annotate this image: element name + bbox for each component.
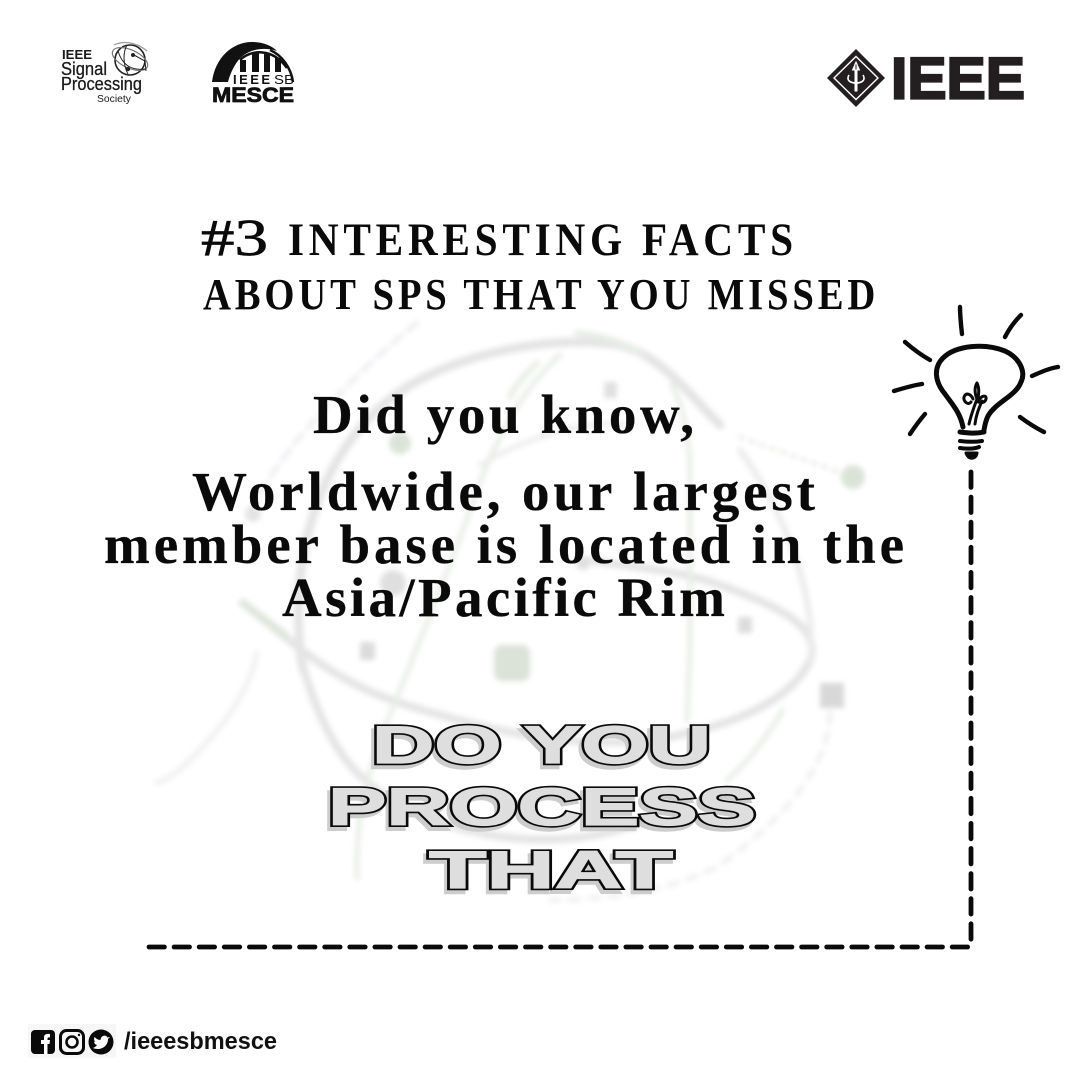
social footer xyxy=(28,1024,277,1058)
icon: instagram xyxy=(60,1030,84,1054)
logo: IEEE Signal Processing Society xyxy=(61,43,151,105)
logo: IEEE main xyxy=(827,46,1025,112)
body: fact statement: Worldwide, our largest xyxy=(192,461,816,522)
icon: signal processing globe xyxy=(109,43,151,75)
icon: twitter xyxy=(88,1030,114,1054)
heading: #3 interesting facts: INTERESTING FACTS xyxy=(288,214,793,266)
callout: do you process that: PROCESS xyxy=(328,778,756,837)
icon: facebook xyxy=(31,1030,55,1054)
subheading: about SPS: ABOUT SPS THAT YOU MISSED xyxy=(203,270,875,319)
body: fact statement xyxy=(104,461,904,628)
callout: do you process that: DO YOU xyxy=(369,720,708,779)
callout: do you process that: THAT xyxy=(429,841,673,900)
logo: IEEE SB MESCE xyxy=(212,42,294,107)
callout: do you process that: PROCESS xyxy=(328,778,756,837)
callout: do you process that: THAT xyxy=(429,841,673,900)
social handle: /ieeesbmesce xyxy=(124,1028,277,1055)
logo: IEEE SB MESCE: MESCE xyxy=(212,84,294,107)
logo: IEEE main: IEEE xyxy=(891,46,1025,112)
logo: IEEE Signal Processing Society: Signal xyxy=(61,58,107,79)
icon: light bulb xyxy=(894,307,1058,458)
body: did you know: Did you know, xyxy=(313,384,694,445)
logo: IEEE SB MESCE: SB xyxy=(274,72,294,87)
logo: IEEE Signal Processing Society: Society xyxy=(97,93,132,105)
callout: do you process that: THAT xyxy=(426,845,670,904)
callout: do you process that: DO YOU xyxy=(372,716,711,775)
callout: do you process that xyxy=(325,716,756,904)
logo: IEEE SB MESCE: IEEE xyxy=(233,72,270,87)
heading: #3 interesting facts: #3 xyxy=(201,210,268,267)
body: fact statement: member base is located in the xyxy=(104,514,904,575)
dashed connector line xyxy=(149,472,971,947)
background watermark: blurred signal processing globe xyxy=(157,323,865,900)
logo: IEEE Signal Processing Society: IEEE xyxy=(62,47,92,62)
callout: do you process that: DO YOU xyxy=(372,716,711,775)
logo: IEEE Signal Processing Society: Processing xyxy=(61,73,142,94)
body: fact statement: Asia/Pacific Rim xyxy=(282,567,725,628)
icon: IEEE diamond xyxy=(827,49,885,107)
callout: do you process that: PROCESS xyxy=(325,782,753,841)
